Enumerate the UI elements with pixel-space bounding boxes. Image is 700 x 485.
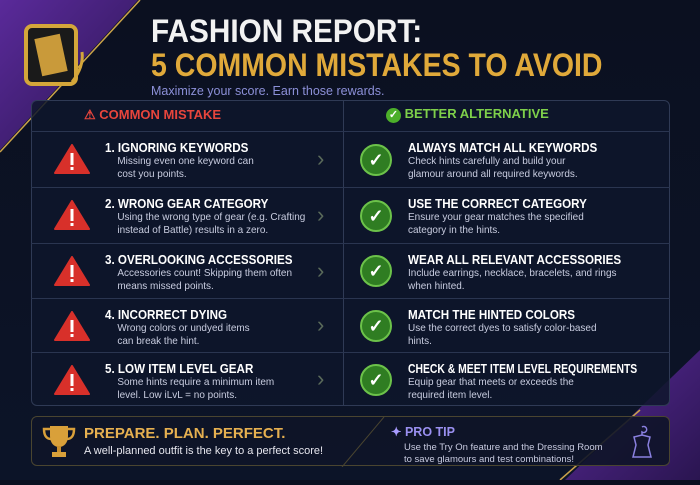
alternative text: ALWAYS MATCH ALL KEYWORDS: [408, 141, 597, 155]
mistake text: 1. IGNORING KEYWORDS: [105, 141, 248, 155]
mistake text: [105, 197, 305, 236]
alternative text: Check hints carefully and build your: [408, 155, 565, 167]
mistake text: 4. INCORRECT DYING: [105, 308, 227, 322]
alternative text: [408, 308, 597, 346]
check icon: [360, 144, 392, 176]
pro tip: to save glamours and test combinations!: [404, 454, 574, 465]
warning icon: [54, 144, 90, 174]
mistake text: [105, 141, 254, 180]
header: better alternative: BETTER ALTERNATIVE: [405, 106, 549, 121]
alternative text: Ensure your gear matches the specified: [408, 211, 584, 223]
check icon: ✓: [368, 150, 384, 170]
warning icon: [54, 256, 90, 286]
check icon: [360, 364, 392, 396]
alternative text: [408, 197, 587, 236]
check icon: [360, 200, 392, 232]
title: Maximize your score. Earn those rewards.: [151, 84, 384, 98]
bottom banner: [31, 416, 670, 466]
alternative text: Use the correct dyes to satisfy color-based: [408, 322, 597, 334]
mistake text: Accessories count! Skipping them often: [117, 267, 292, 279]
chevron: ›: [317, 366, 324, 391]
check icon: ✓: [368, 316, 384, 336]
icon: hanger dress: [632, 426, 652, 458]
mistake text: Some hints require a minimum item: [117, 376, 274, 388]
alternative text: WEAR ALL RELEVANT ACCESSORIES: [408, 253, 621, 267]
mistake text: cost you points.: [117, 168, 187, 180]
column divider: [343, 100, 344, 406]
alternative text: [408, 141, 597, 180]
check icon: ✓: [368, 370, 384, 390]
chevron: ›: [317, 202, 324, 227]
mistake text: Wrong colors or undyed items: [117, 322, 250, 334]
table panel: [31, 100, 670, 406]
slogan: [84, 425, 323, 457]
alternative text: MATCH THE HINTED COLORS: [408, 308, 575, 322]
check icon: ✓: [368, 261, 384, 281]
warning icon: [54, 365, 90, 395]
row 5: [31, 352, 670, 406]
mistake text: [105, 362, 274, 400]
warning icon: [54, 200, 90, 230]
mistake text: Using the wrong type of gear (e.g. Crafting: [117, 211, 305, 223]
chevron: ›: [317, 258, 324, 283]
mistake text: can break the hint.: [117, 334, 199, 346]
warning icon: [54, 311, 90, 341]
mistake text: [105, 253, 293, 292]
mistake text: means missed points.: [117, 280, 214, 292]
pro tip: Use the Try On feature and the Dressing Room: [404, 442, 603, 453]
alternative text: Equip gear that meets or exceeds the: [408, 376, 574, 388]
row 3: [31, 243, 670, 298]
row 4: [31, 298, 670, 352]
mistake text: Missing even one keyword can: [117, 155, 254, 167]
pro tip: ✦ PRO TIP: [391, 425, 455, 439]
alternative text: hints.: [408, 334, 432, 346]
row 1: [31, 131, 670, 187]
slogan: PREPARE. PLAN. PERFECT.: [84, 425, 285, 442]
mistake text: 3. OVERLOOKING ACCESSORIES: [105, 253, 293, 267]
slogan: A well-planned outfit is the key to a perfect score!: [84, 445, 323, 457]
icon: gold framed card: [24, 24, 84, 86]
alternative text: category in the hints.: [408, 224, 500, 236]
divider diagonal: [342, 417, 384, 467]
chevron: ›: [317, 312, 324, 337]
row 2: [31, 187, 670, 243]
mistake text: 2. WRONG GEAR CATEGORY: [105, 197, 268, 211]
alternative text: required item level.: [408, 388, 492, 400]
alternative text: Include earrings, necklace, bracelets, and rings: [408, 267, 616, 279]
alternative text: [408, 253, 621, 292]
alternative text: USE THE CORRECT CATEGORY: [408, 197, 587, 211]
pro tip: [391, 425, 603, 465]
title: 5 COMMON MISTAKES TO AVOID: [151, 47, 602, 83]
check icon: [360, 310, 392, 342]
alternative text: CHECK & MEET ITEM LEVEL REQUIREMENTS: [408, 362, 637, 376]
mistake text: [105, 308, 250, 346]
header: common mistake: ⚠ COMMON MISTAKE: [84, 107, 221, 122]
alternative text: glamour around all required keywords.: [408, 168, 578, 180]
mistake text: instead of Battle) results in a zero.: [117, 224, 268, 236]
alternative text: [408, 362, 637, 400]
mistake text: 5. LOW ITEM LEVEL GEAR: [105, 362, 253, 376]
icon: trophy: [42, 426, 76, 457]
check icon: [360, 255, 392, 287]
title: FASHION REPORT:: [151, 13, 422, 49]
header: better alternative: ✓: [389, 109, 398, 121]
title: [151, 13, 602, 98]
chevron: ›: [317, 146, 324, 171]
mistake text: level. Low iLvL = no points.: [117, 388, 237, 400]
check icon: ✓: [368, 206, 384, 226]
alternative text: when hinted.: [408, 280, 465, 292]
